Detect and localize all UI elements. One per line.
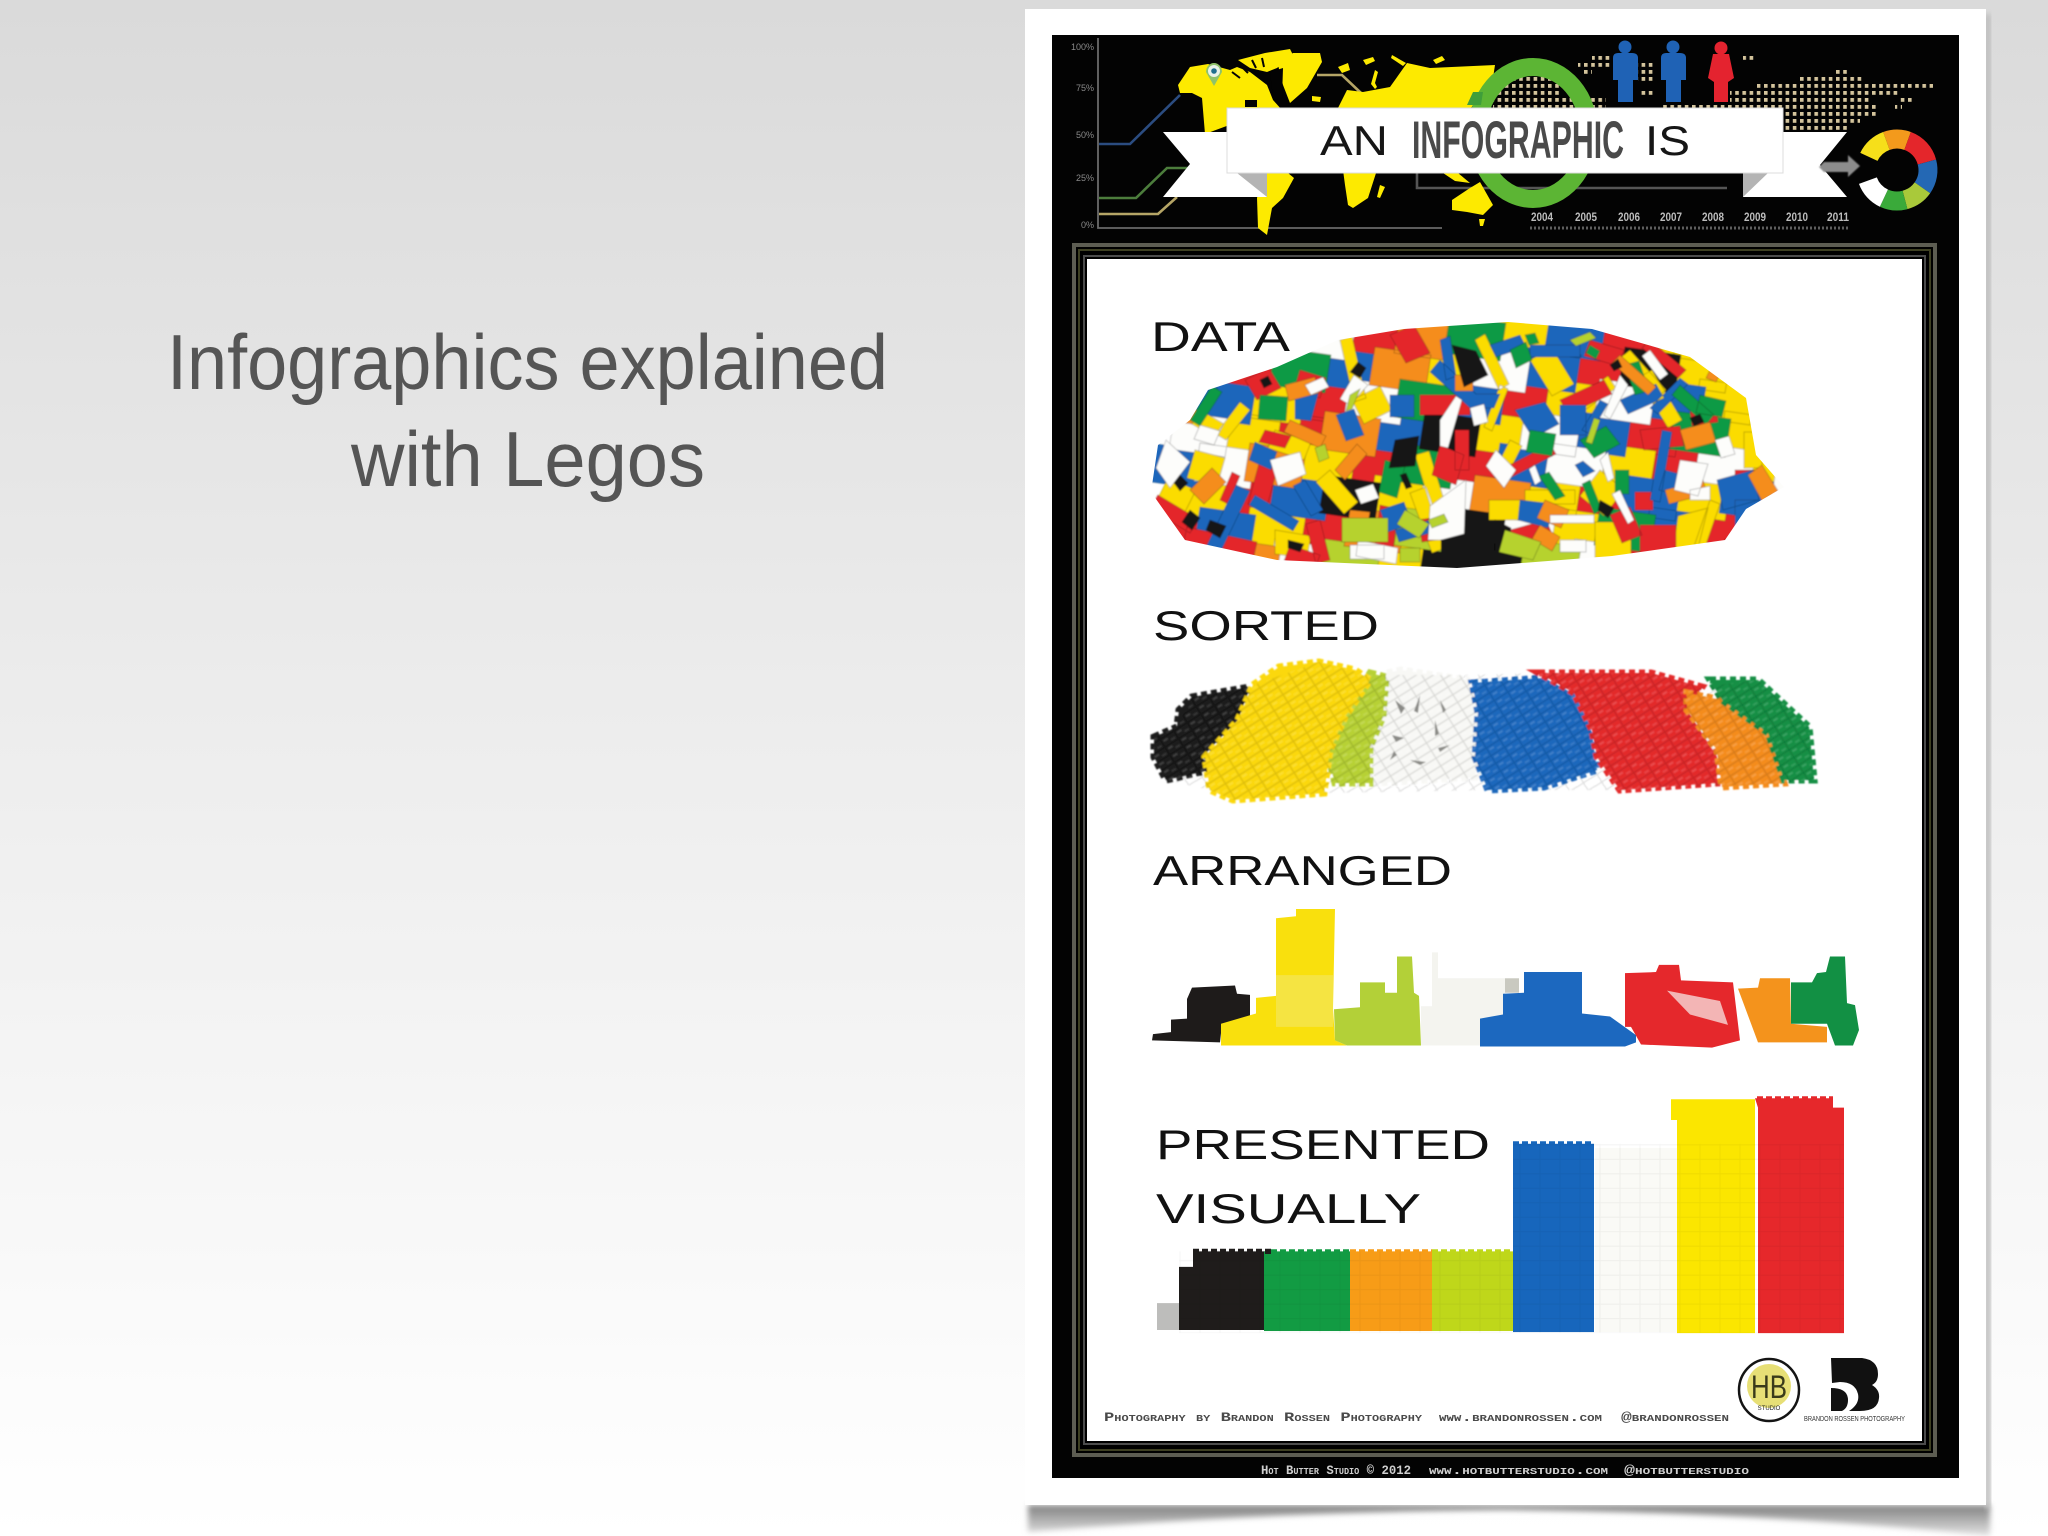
- bar: orange: [1350, 1251, 1432, 1331]
- slide title: with Legos: [350, 415, 705, 503]
- yellow world map: [1178, 49, 1495, 235]
- scattered top bricks: [1150, 325, 1778, 571]
- framed panel: [1074, 245, 1935, 1455]
- bar: blue: [1513, 1144, 1594, 1332]
- dotted world map: [1493, 56, 1933, 132]
- poster title: IS: [1645, 117, 1690, 164]
- brick bar chart: [1157, 1098, 1844, 1333]
- studio credit: [1261, 1463, 1750, 1478]
- year labels: 2004: [1531, 210, 1553, 224]
- axis percent labels: 100%: [1071, 42, 1094, 52]
- bar: green: [1264, 1251, 1350, 1331]
- studio credit: Hot Butter Studio © 2012: [1261, 1463, 1411, 1478]
- studio credit: www.hotbutterstudio.com: [1429, 1463, 1608, 1478]
- ribbon main: [1227, 108, 1783, 173]
- axis percent labels: 25%: [1076, 173, 1094, 183]
- grey arrow: [1819, 155, 1860, 177]
- poster title: INFOGRAPHIC: [1412, 111, 1624, 170]
- green ring: [1477, 67, 1589, 199]
- label: presented visually: [1156, 1121, 1490, 1232]
- label: sorted: SORTED: [1153, 602, 1379, 649]
- slide title: Infographics explained: [167, 318, 888, 406]
- ribbon folds: [1237, 173, 1768, 197]
- arctic gaps: [1245, 68, 1283, 107]
- black poster background: [1052, 35, 1959, 1478]
- poster title: AN: [1320, 117, 1388, 164]
- logo: hot butter: [1739, 1359, 1799, 1421]
- label: data: DATA: [1151, 313, 1290, 360]
- logo: hot butter: HB: [1751, 1369, 1787, 1405]
- arranged stacks by colour: [1152, 909, 1859, 1048]
- map pin: [1206, 63, 1222, 86]
- studio credit: @hotbutterstudio: [1624, 1463, 1750, 1478]
- axis percent labels: 50%: [1076, 130, 1094, 140]
- bar: yellow: [1671, 1099, 1755, 1333]
- sorted piles by colour: [1154, 662, 1814, 800]
- year labels: 2006: [1618, 210, 1640, 224]
- axis percent labels: 75%: [1076, 83, 1094, 93]
- slide title: [167, 318, 888, 503]
- bar: lime: [1432, 1251, 1513, 1331]
- label: arranged: ARRANGED: [1153, 847, 1452, 894]
- people icons: [1613, 40, 1734, 102]
- photography credit: @brandonrossen: [1621, 1410, 1729, 1425]
- year labels: 2010: [1786, 210, 1808, 224]
- card shadow: [1028, 14, 1991, 1536]
- photography credit: [1104, 1410, 1729, 1425]
- year labels: [1531, 210, 1849, 224]
- ribbon tails: [1163, 132, 1847, 197]
- base mosaic of bricks: [1152, 322, 1778, 568]
- bar: white: [1595, 1148, 1677, 1332]
- axis percent labels: [1071, 42, 1094, 230]
- logo: brandon rossen: [1804, 1358, 1905, 1423]
- label: presented visually: PRESENTED: [1156, 1121, 1490, 1168]
- header artwork: [1071, 38, 1933, 235]
- data pile of mixed bricks: [1152, 322, 1779, 568]
- donut chart: [1868, 139, 1928, 201]
- year labels: 2007: [1660, 210, 1682, 224]
- logo: hot butter: STUDIO: [1758, 1406, 1781, 1412]
- photography credit: www.brandonrossen.com: [1439, 1410, 1602, 1425]
- axis percent labels: 0%: [1081, 220, 1094, 230]
- year labels: 2011: [1827, 210, 1849, 224]
- year labels: 2008: [1702, 210, 1724, 224]
- poster card: [1025, 9, 1986, 1505]
- year labels: 2005: [1575, 210, 1597, 224]
- photography credit: Photography by Brandon Rossen Photography: [1104, 1410, 1423, 1425]
- poster title: [1320, 111, 1690, 170]
- year labels: 2009: [1744, 210, 1766, 224]
- chart axis and lines: [1098, 38, 1727, 228]
- label: presented visually: VISUALLY: [1156, 1185, 1421, 1232]
- bar: grey: [1157, 1303, 1179, 1330]
- bar: red: [1755, 1098, 1844, 1333]
- bar: black: [1179, 1251, 1271, 1330]
- logo: brandon rossen: BRANDON ROSSEN PHOTOGRAPHY: [1804, 1416, 1905, 1423]
